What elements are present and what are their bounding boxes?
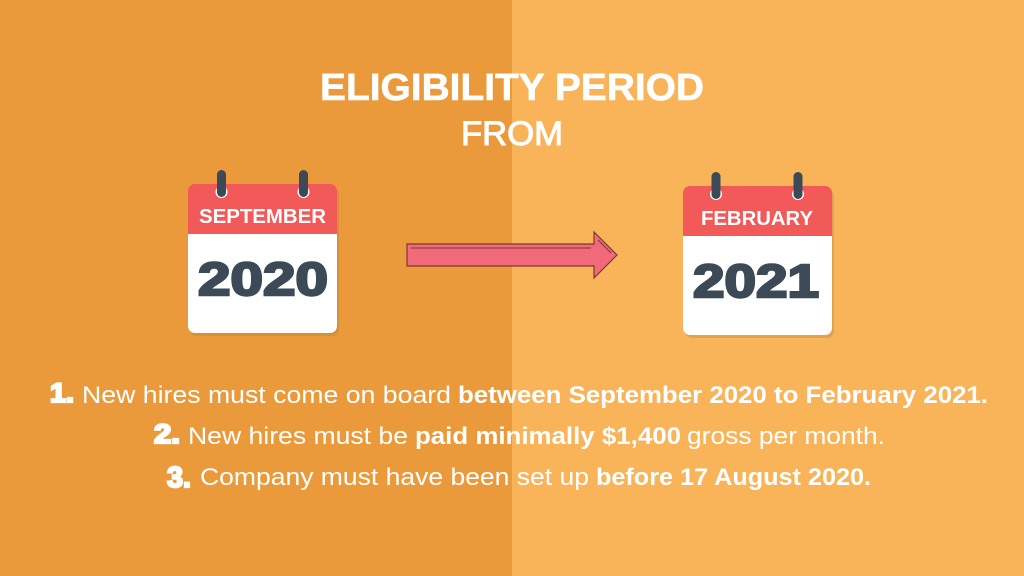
heading: eligibility period from: ELIGIBILITY PERIOD bbox=[320, 67, 704, 109]
text block: criterion 3: before 17 August 2020. bbox=[596, 464, 871, 491]
heading: eligibility period from: FROM bbox=[461, 115, 563, 153]
text block: criterion 3 bbox=[167, 462, 871, 494]
icon: calendar September 2020 bbox=[188, 170, 339, 336]
text block: criterion 2: paid minimally $1,400 bbox=[415, 423, 681, 450]
icon: calendar September 2020: SEPTEMBER bbox=[199, 206, 327, 228]
icon: calendar February 2021 bbox=[683, 172, 834, 338]
panel: left background bbox=[0, 0, 512, 576]
icon: calendar September 2020: 2020 bbox=[198, 253, 328, 305]
arrow bbox=[407, 232, 617, 278]
text block: criterion 2 bbox=[154, 419, 885, 450]
icon: calendar February 2021: FEBRUARY bbox=[701, 208, 814, 230]
icon: calendar February 2021: 2021 bbox=[693, 255, 819, 307]
text block: criterion 1: New hires must come on board bbox=[82, 382, 451, 409]
panel: right background bbox=[512, 0, 1024, 576]
text block: criterion 1: 1. bbox=[50, 378, 74, 408]
text block: criterion 3: Company must have been set up bbox=[200, 464, 589, 491]
text block: criterion 2: New hires must be bbox=[188, 423, 408, 450]
heading: eligibility period from bbox=[320, 67, 704, 153]
text block: criterion 1: between September 2020 to February 2021. bbox=[458, 382, 988, 409]
text block: criterion 2: 2. bbox=[154, 419, 180, 449]
text block: criterion 3: 3. bbox=[167, 462, 191, 494]
text block: criterion 2: gross per month. bbox=[687, 423, 885, 450]
text block: criterion 1 bbox=[50, 378, 988, 409]
